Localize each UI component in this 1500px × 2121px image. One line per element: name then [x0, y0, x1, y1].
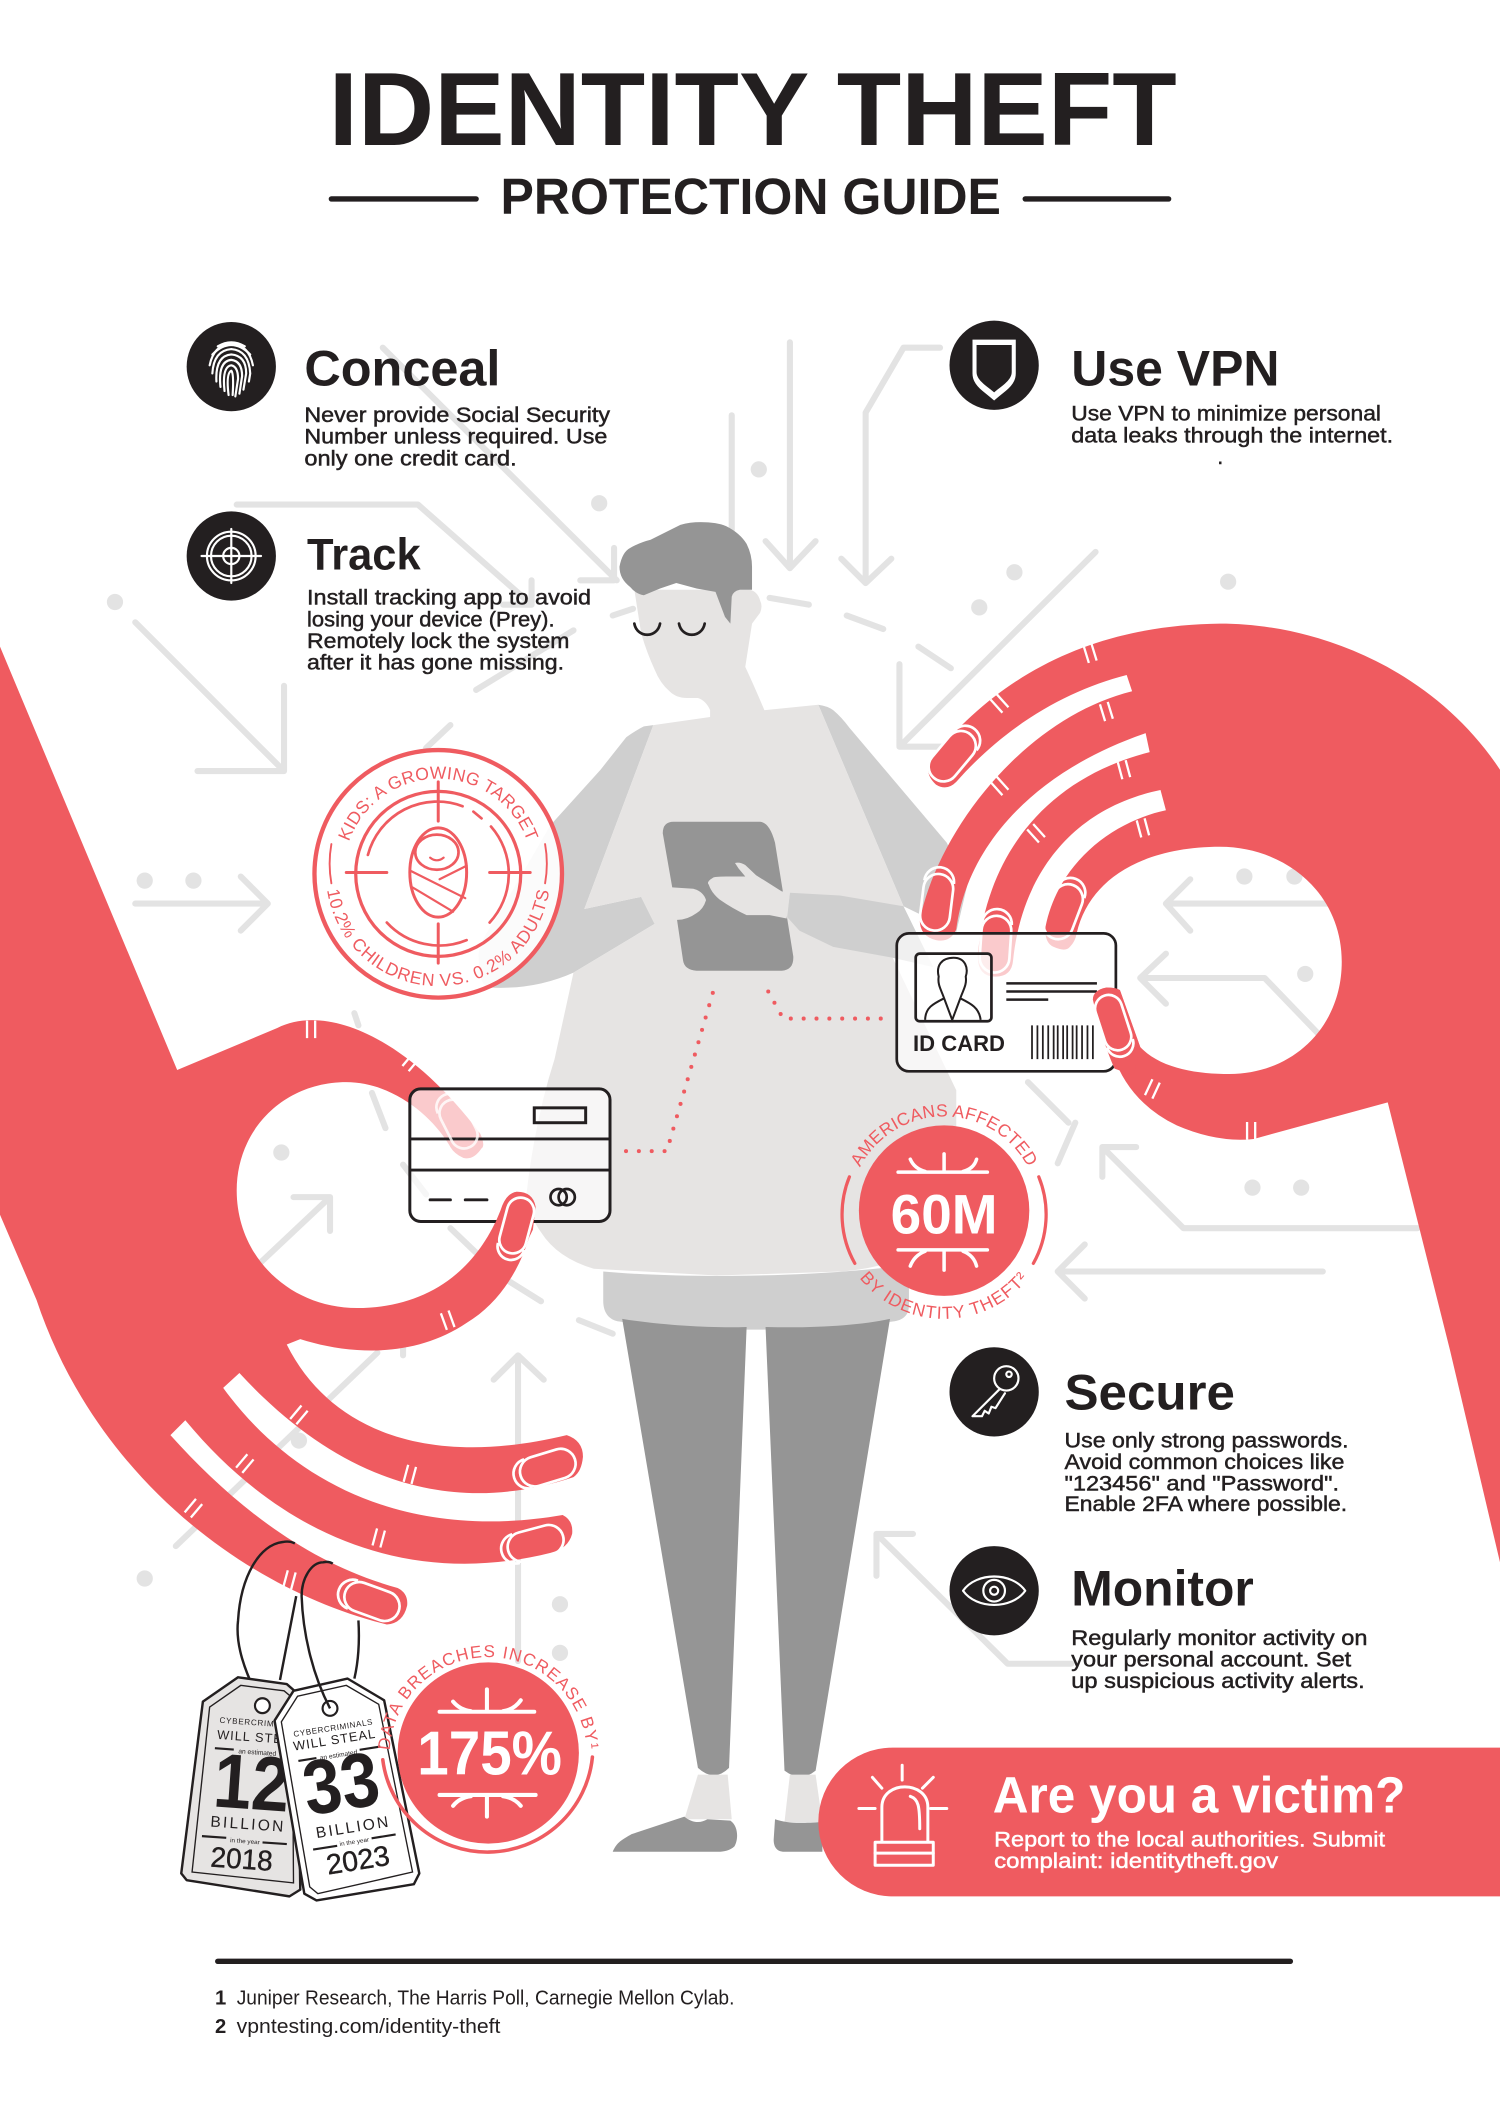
footnotes: Juniper Research, The Harris Poll, Carnegie Mellon Cylab. — [237, 1988, 734, 2010]
title: IDENTITY THEFT — [329, 52, 1177, 168]
monitor text: your personal account. Set — [1071, 1648, 1351, 1671]
badge: data breaches — [378, 1645, 598, 1854]
badge: kids target: KIDS: A GROWING TARGET — [338, 766, 538, 840]
track text: Remotely lock the system — [307, 630, 569, 653]
icon: eye — [950, 1546, 1039, 1635]
panel: monitor — [950, 1546, 1367, 1693]
price tag: 2023: 33 — [297, 1736, 385, 1832]
dotted connectors — [617, 992, 885, 1151]
panel: track: Track — [307, 531, 421, 580]
footnotes: vpntesting.com/identity-theft — [237, 2016, 501, 2038]
price tag: 2018: CYBERCRIMINALS — [219, 1716, 301, 1730]
vpn text: Use VPN to minimize personal — [1071, 403, 1381, 426]
credit card — [410, 1089, 610, 1263]
icon: fingerprint — [187, 322, 276, 411]
badge: data breaches: 175% — [417, 1720, 562, 1789]
badge: kids target — [312, 748, 564, 1000]
monitor text — [1071, 1627, 1367, 1693]
secure text: Avoid common choices like — [1064, 1451, 1344, 1474]
conceal text: only one credit card. — [304, 447, 517, 470]
badge: 60M americans affected: BY IDENTITY THEFT² — [860, 1271, 1024, 1319]
price tag: 2023: WILL STEAL — [292, 1726, 376, 1754]
track text — [307, 587, 591, 675]
price tag: 2018: in the year — [230, 1837, 260, 1846]
thumb over credit card — [490, 1192, 537, 1263]
price tag: 2023 — [275, 1562, 419, 1900]
left hand holding credit card — [0, 647, 583, 1625]
ID card: ID CARD — [913, 1031, 1005, 1056]
footnotes — [215, 1961, 1290, 2038]
price tag: 2018 — [181, 1542, 301, 1896]
secure text: Enable 2FA where possible. — [1064, 1493, 1347, 1516]
footnotes: 1 — [215, 1988, 226, 2010]
conceal text: Number unless required. Use — [304, 426, 607, 449]
badge: 60M americans affected: 60M — [891, 1184, 998, 1246]
icon: target — [187, 511, 276, 601]
secure text — [1064, 1429, 1349, 1516]
icon: key — [950, 1347, 1039, 1437]
vpn text — [1071, 403, 1393, 469]
badge: 60M americans affected — [840, 1104, 1048, 1319]
background arrows and dots — [107, 342, 1417, 1664]
callout text — [994, 1828, 1385, 1873]
ID card — [897, 933, 1140, 1075]
price tag: 2018: an estimated — [238, 1748, 277, 1758]
panel: use vpn — [950, 321, 1393, 469]
callout text: Report to the local authorities. Submit — [994, 1828, 1385, 1851]
price tag: 2018: BILLION — [210, 1814, 284, 1836]
footnotes: 2 — [215, 2016, 226, 2038]
price tag: 2018: WILL STEAL — [217, 1727, 300, 1748]
panel: conceal: Conceal — [304, 341, 500, 397]
right hand holding ID card — [918, 624, 1500, 1562]
conceal text: Never provide Social Security — [304, 404, 611, 427]
vpn text: data leaks through the internet. — [1071, 424, 1393, 447]
panel: secure — [950, 1347, 1349, 1516]
icon: alarm — [859, 1765, 947, 1865]
track text: losing your device (Prey). — [307, 608, 555, 631]
secure text: Use only strong passwords. — [1064, 1429, 1349, 1452]
price tag: 2018: 12 — [211, 1738, 293, 1829]
person illustration — [479, 522, 967, 1852]
price tag: 2018: 2018 — [210, 1842, 274, 1878]
callout: are you a victim: Are you a victim? — [993, 1766, 1405, 1824]
badge: 60M americans affected: AMERICANS AFFECTED — [852, 1104, 1036, 1168]
callout: are you a victim — [818, 1748, 1500, 1896]
price tag: 2023: an estimated — [319, 1749, 358, 1762]
track text: Install tracking app to avoid — [307, 587, 591, 610]
title: PROTECTION GUIDE — [500, 167, 1001, 225]
price tag: 2023: BILLION — [315, 1814, 390, 1842]
vpn text: . — [1217, 446, 1223, 469]
panel: monitor: Monitor — [1071, 1561, 1254, 1617]
monitor text: up suspicious activity alerts. — [1071, 1670, 1365, 1693]
badge: data breaches: DATA BREACHES INCREASE BY¹ — [378, 1645, 598, 1750]
panel: conceal — [187, 322, 611, 470]
monitor text: Regularly monitor activity on — [1071, 1627, 1367, 1650]
price tag: 2023: 2023 — [324, 1840, 392, 1882]
panel: track — [187, 511, 591, 675]
panel: secure: Secure — [1064, 1364, 1235, 1420]
track text: after it has gone missing. — [307, 652, 564, 675]
thumb over ID card — [1092, 987, 1140, 1075]
price tag: 2023: in the year — [339, 1836, 370, 1848]
icon: shield — [950, 321, 1039, 410]
badge: kids target: 10.2% CHILDREN VS. 0.2% ADULTS — [327, 890, 548, 986]
callout text: complaint: identitytheft.gov — [994, 1850, 1279, 1873]
price tag: 2023: CYBERCRIMINALS — [293, 1717, 374, 1739]
secure text: "123456" and "Password". — [1064, 1473, 1339, 1496]
conceal text — [304, 404, 611, 470]
title — [329, 52, 1177, 225]
panel: use vpn: Use VPN — [1071, 341, 1280, 397]
